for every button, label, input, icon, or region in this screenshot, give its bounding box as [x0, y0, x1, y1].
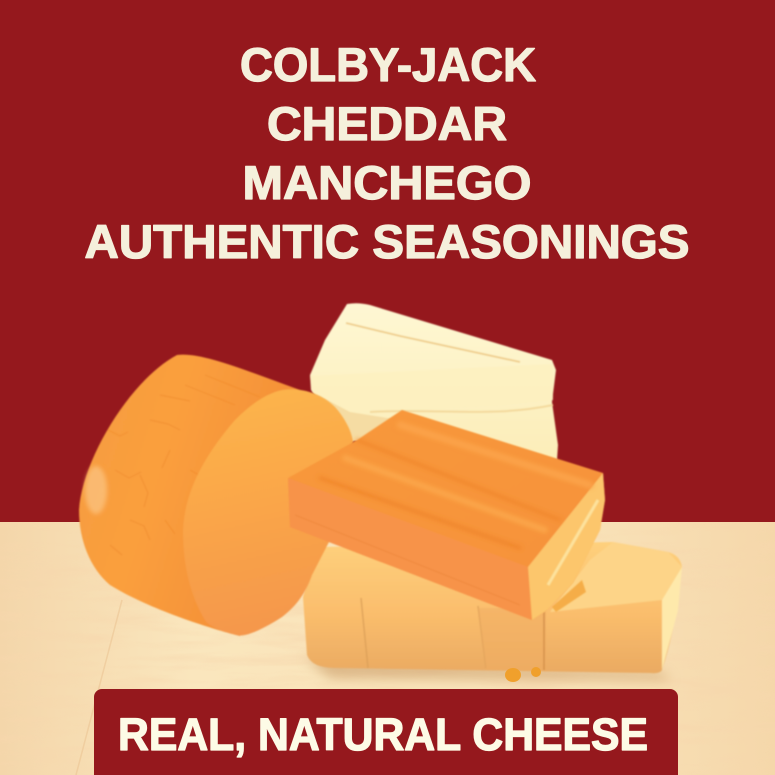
heading: cheese list: CHEDDAR — [267, 97, 507, 150]
cheese: orange cheddar bar — [288, 410, 605, 620]
heading: cheese list: MANCHEGO — [242, 156, 532, 209]
illustration: cheese pile — [79, 303, 682, 682]
heading: cheese list: AUTHENTIC SEASONINGS — [84, 215, 690, 268]
cheese: yellow cheddar block — [303, 542, 682, 673]
heading: cheese list: COLBY-JACK — [240, 38, 536, 91]
heading: cheese list — [84, 38, 690, 268]
cheese: round colby-jack wheel — [79, 355, 353, 636]
shadow under block — [305, 658, 672, 680]
cheese drops — [505, 667, 541, 682]
cheese: white manchego wedge — [310, 303, 558, 460]
callout: real natural cheese: REAL, NATURAL CHEESE — [118, 709, 648, 760]
callout: real natural cheese — [94, 689, 678, 775]
wood table surface — [0, 522, 775, 775]
